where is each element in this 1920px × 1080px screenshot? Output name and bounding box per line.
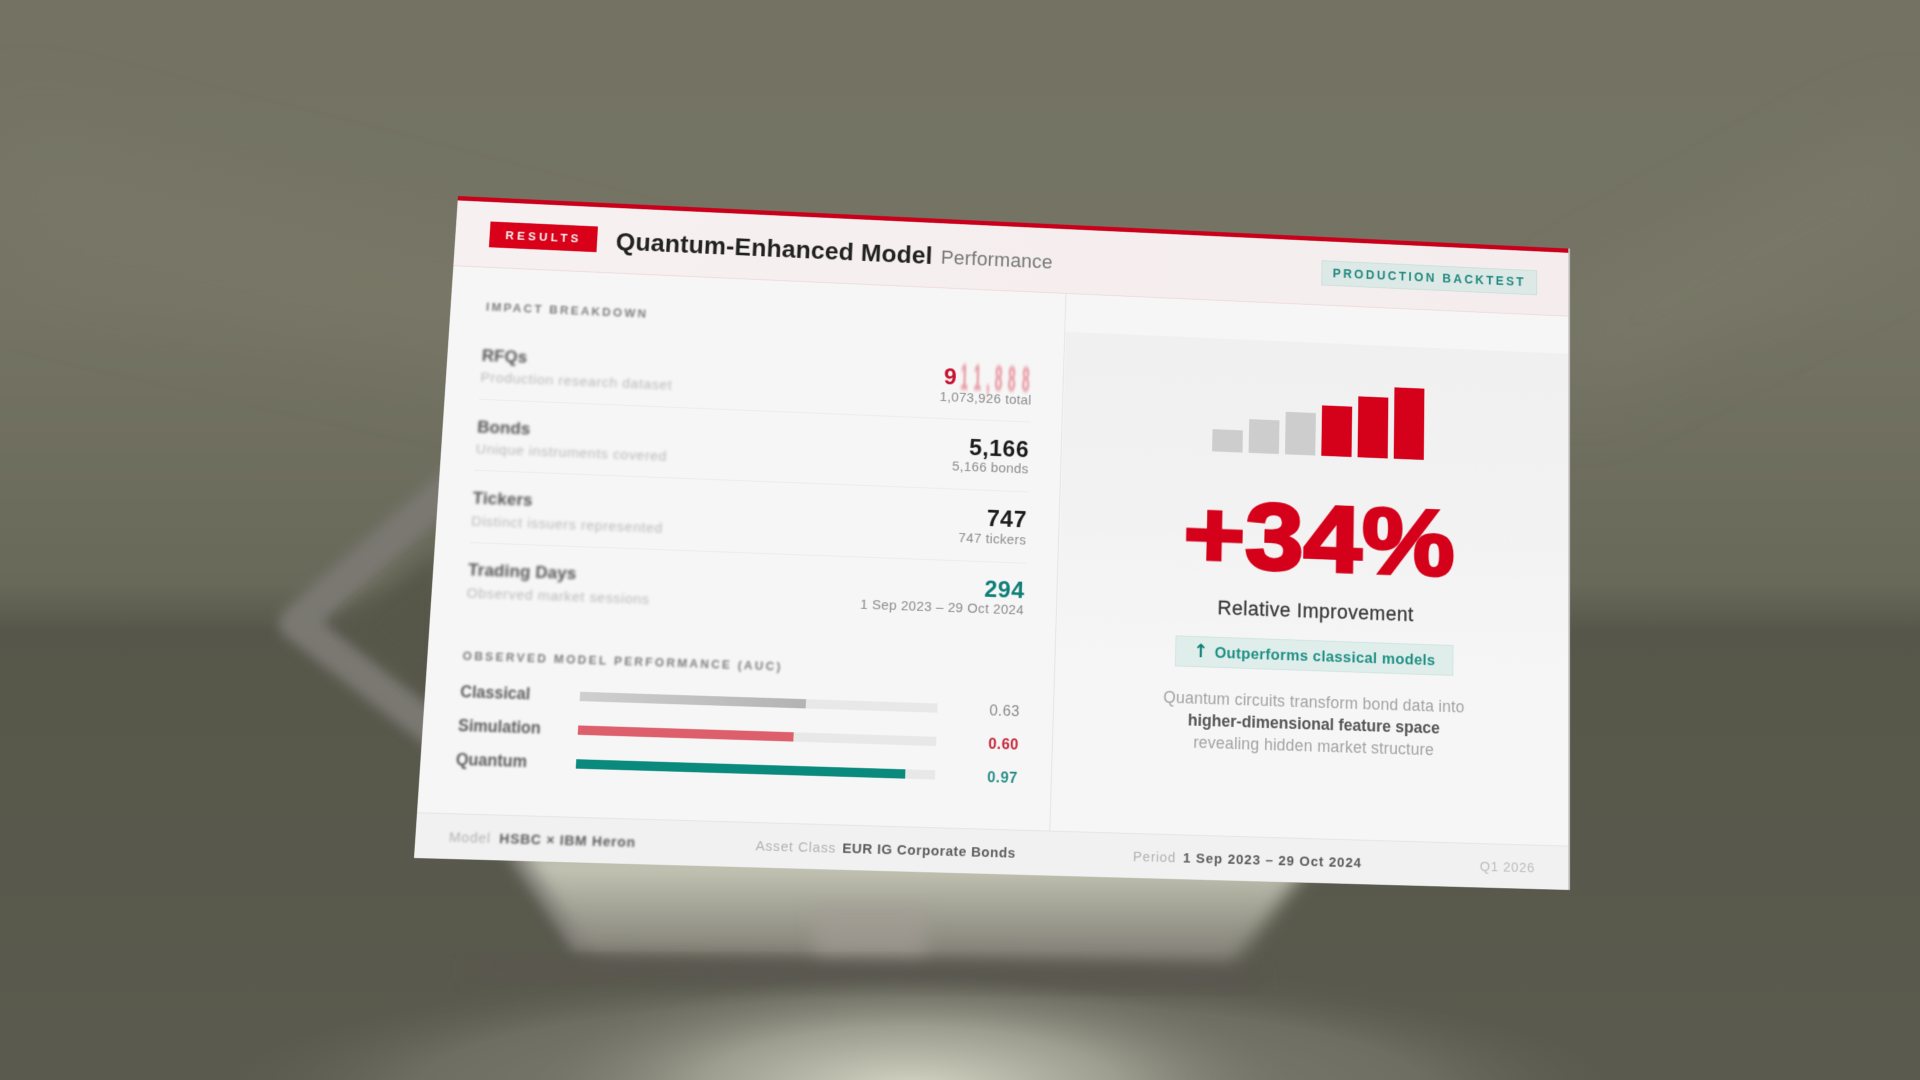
label: Classical bbox=[460, 682, 531, 703]
badge: production backtest: PRODUCTION BACKTEST bbox=[1333, 266, 1526, 289]
track and fill bbox=[580, 692, 938, 713]
row: RFQs bbox=[480, 346, 1032, 408]
note: 5,166 bonds bbox=[952, 459, 1029, 477]
text: description: Quantum circuits transform bond data into bbox=[1163, 688, 1465, 716]
value: rolling counter: 8 bbox=[1007, 358, 1017, 399]
panel: results card bbox=[414, 196, 1570, 890]
caption: relative improvement: Relative Improvement bbox=[1217, 596, 1414, 626]
text: description: higher-dimensional feature space bbox=[1188, 711, 1440, 737]
value: rolling counter: 1 bbox=[959, 356, 969, 397]
heading: impact breakdown: IMPACT BREAKDOWN bbox=[486, 300, 649, 320]
badge: production backtest bbox=[1321, 260, 1537, 295]
title: Quantum-Enhanced Model bbox=[615, 227, 933, 269]
bar row: Simulation bbox=[457, 716, 1019, 753]
icon: ascending bars bbox=[1212, 387, 1425, 460]
badge: results: RESULTS bbox=[505, 228, 582, 245]
value: rolling counter: 8 bbox=[993, 357, 1003, 399]
footer: date: Q1 2026 bbox=[1480, 859, 1535, 876]
description: Observed market sessions bbox=[466, 585, 650, 608]
label: RFQs: RFQs bbox=[481, 346, 528, 366]
row: Bonds bbox=[475, 417, 1030, 477]
value: rolling counter bbox=[943, 356, 1030, 400]
text: description: revealing hidden market structure bbox=[1193, 733, 1434, 759]
heading: model performance: OBSERVED MODEL PERFORMANCE (AUC) bbox=[462, 649, 783, 673]
card right edge bbox=[1568, 249, 1570, 890]
text: description bbox=[1163, 688, 1465, 759]
description: Unique instruments covered bbox=[475, 441, 667, 465]
label: Simulation bbox=[457, 716, 541, 737]
value: 294: 294 bbox=[984, 575, 1025, 604]
value: rolling counter: , bbox=[985, 357, 991, 398]
label: Bonds: Bonds bbox=[477, 417, 531, 438]
value: rolling counter: 9 bbox=[943, 362, 958, 390]
bar chart: AUC comparison bbox=[455, 682, 1020, 787]
header band bbox=[453, 196, 1570, 317]
value: rolling counter: 1 bbox=[973, 356, 982, 398]
label: Trading Days: Trading Days bbox=[468, 560, 577, 583]
badge: results bbox=[489, 222, 598, 252]
footer: asset class: EUR IG Corporate Bonds bbox=[842, 841, 1016, 861]
note: 1,073,926 total bbox=[939, 389, 1032, 408]
footer: asset class bbox=[755, 838, 1016, 861]
value: 747: 747 bbox=[986, 504, 1027, 533]
subtitle: Performance bbox=[940, 246, 1053, 273]
panel: impact breakdown bbox=[417, 266, 1066, 831]
value: 0.97 bbox=[987, 769, 1018, 787]
bar row: Classical bbox=[459, 682, 1020, 720]
panel: right highlight background bbox=[1051, 332, 1570, 846]
label: Tickers: Tickers bbox=[472, 488, 533, 509]
bar row: Quantum bbox=[455, 750, 1018, 787]
footer: period: Period bbox=[1133, 849, 1176, 866]
callout: outperforms: ↑ Outperforms classical models bbox=[1193, 640, 1435, 669]
footer: model bbox=[448, 829, 636, 851]
label: Quantum bbox=[455, 750, 528, 771]
big number: +34%: +34% bbox=[1182, 481, 1455, 597]
footer bar bbox=[414, 812, 1570, 890]
note: 747 tickers bbox=[958, 530, 1026, 548]
footer: asset class: Asset Class bbox=[755, 838, 836, 856]
footer: period: 1 Sep 2023 – 29 Oct 2024 bbox=[1183, 850, 1362, 871]
value: 0.60 bbox=[988, 736, 1019, 753]
footer: model: HSBC × IBM Heron bbox=[499, 831, 636, 851]
footer: model: Model bbox=[448, 829, 491, 847]
note: 1 Sep 2023 – 29 Oct 2024 bbox=[860, 597, 1024, 618]
track and fill bbox=[578, 725, 936, 746]
value: 0.63 bbox=[989, 702, 1020, 720]
red top rule bbox=[458, 196, 1570, 253]
description: Distinct issuers represented bbox=[471, 514, 663, 536]
value: 5,166: 5,166 bbox=[969, 433, 1030, 463]
value: rolling counter: 8 bbox=[1021, 358, 1030, 400]
row: Tickers bbox=[471, 488, 1027, 548]
track and fill bbox=[576, 759, 935, 780]
description: Production research dataset bbox=[480, 370, 673, 393]
callout: outperforms bbox=[1175, 635, 1453, 676]
row: Trading Days bbox=[466, 560, 1025, 618]
